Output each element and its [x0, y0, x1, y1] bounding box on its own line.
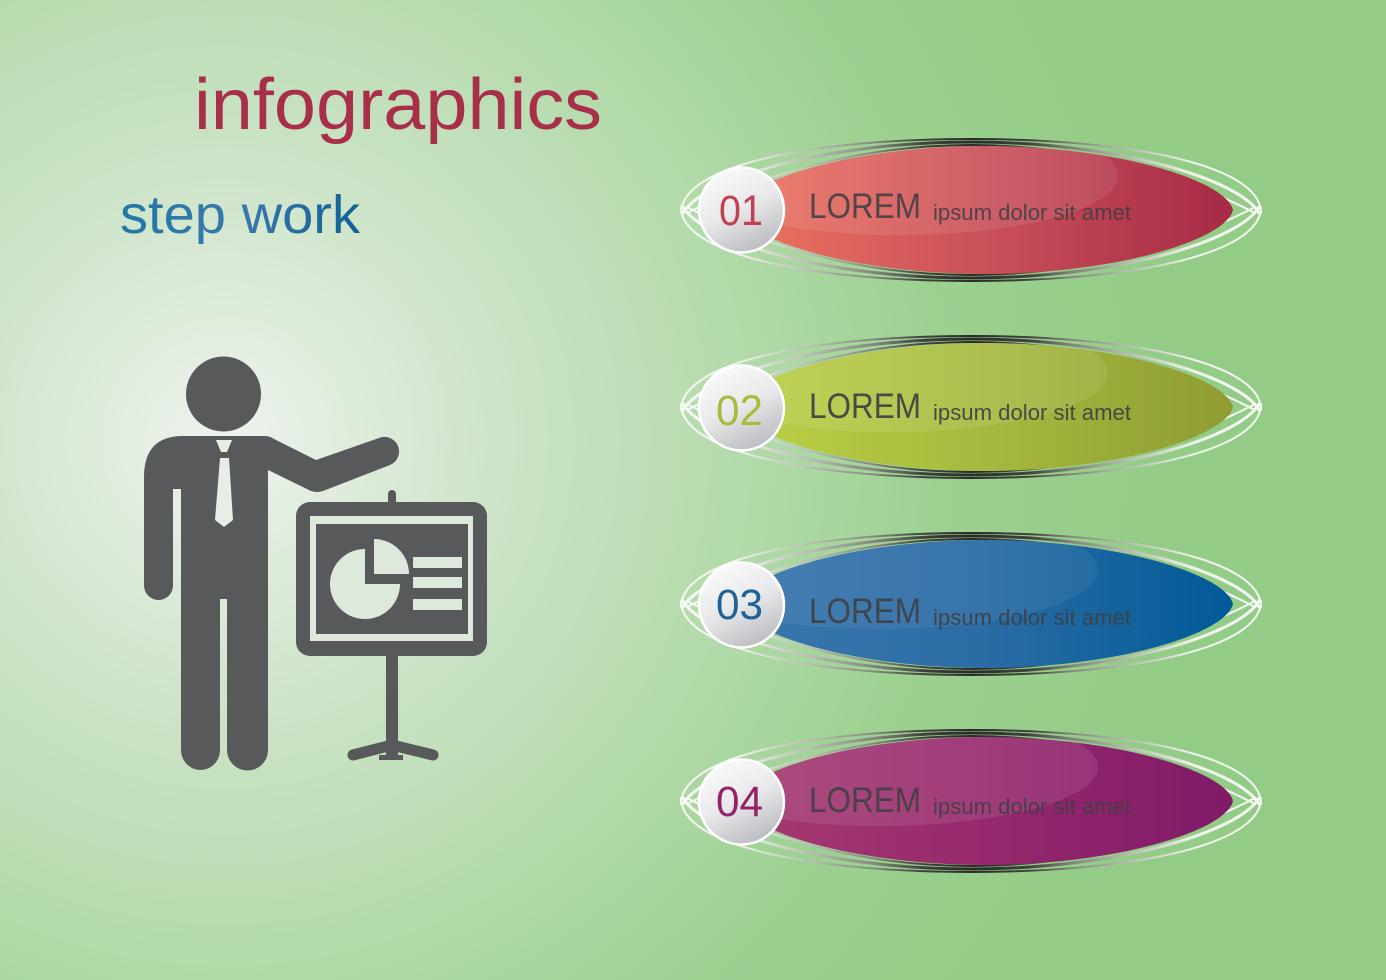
label heading: LOREM	[809, 187, 921, 226]
pill	[737, 737, 1233, 865]
board stand	[353, 656, 433, 760]
title: infographics	[194, 65, 602, 145]
number badge	[699, 366, 784, 450]
step 02	[680, 335, 1262, 479]
step 04	[680, 729, 1262, 873]
step 03	[680, 532, 1262, 676]
number: 02	[716, 387, 763, 435]
pill	[737, 540, 1233, 668]
chart legend lines	[413, 557, 462, 610]
rings	[681, 336, 1261, 478]
label text: ipsum dolor sit amet	[933, 400, 1131, 425]
number badge	[699, 168, 784, 252]
rings	[681, 533, 1261, 675]
pill	[737, 343, 1233, 471]
icon: person head	[186, 356, 261, 432]
icon: necktie	[215, 440, 233, 527]
rings	[681, 730, 1261, 872]
label text: ipsum dolor sit amet	[933, 605, 1131, 630]
number: 01	[719, 187, 763, 235]
pill	[737, 146, 1233, 274]
pie chart	[330, 539, 409, 619]
icon: presentation board	[296, 490, 487, 760]
label heading: LOREM	[809, 781, 921, 820]
number: 04	[716, 778, 763, 826]
step 01	[680, 138, 1262, 282]
icon: person body	[144, 436, 399, 770]
rings	[681, 139, 1261, 281]
label text: ipsum dolor sit amet	[933, 200, 1131, 225]
number: 03	[716, 581, 763, 629]
highlight	[774, 343, 1108, 432]
number badge	[699, 760, 784, 844]
label heading: LOREM	[809, 592, 921, 631]
highlight	[774, 146, 1118, 235]
subtitle: step work	[120, 185, 361, 245]
icon: presenter with chart board	[144, 356, 487, 770]
highlight	[774, 737, 1098, 826]
label text: ipsum dolor sit amet	[933, 794, 1131, 819]
number badge	[699, 562, 784, 648]
highlight	[774, 540, 1098, 629]
label heading: LOREM	[809, 387, 921, 426]
